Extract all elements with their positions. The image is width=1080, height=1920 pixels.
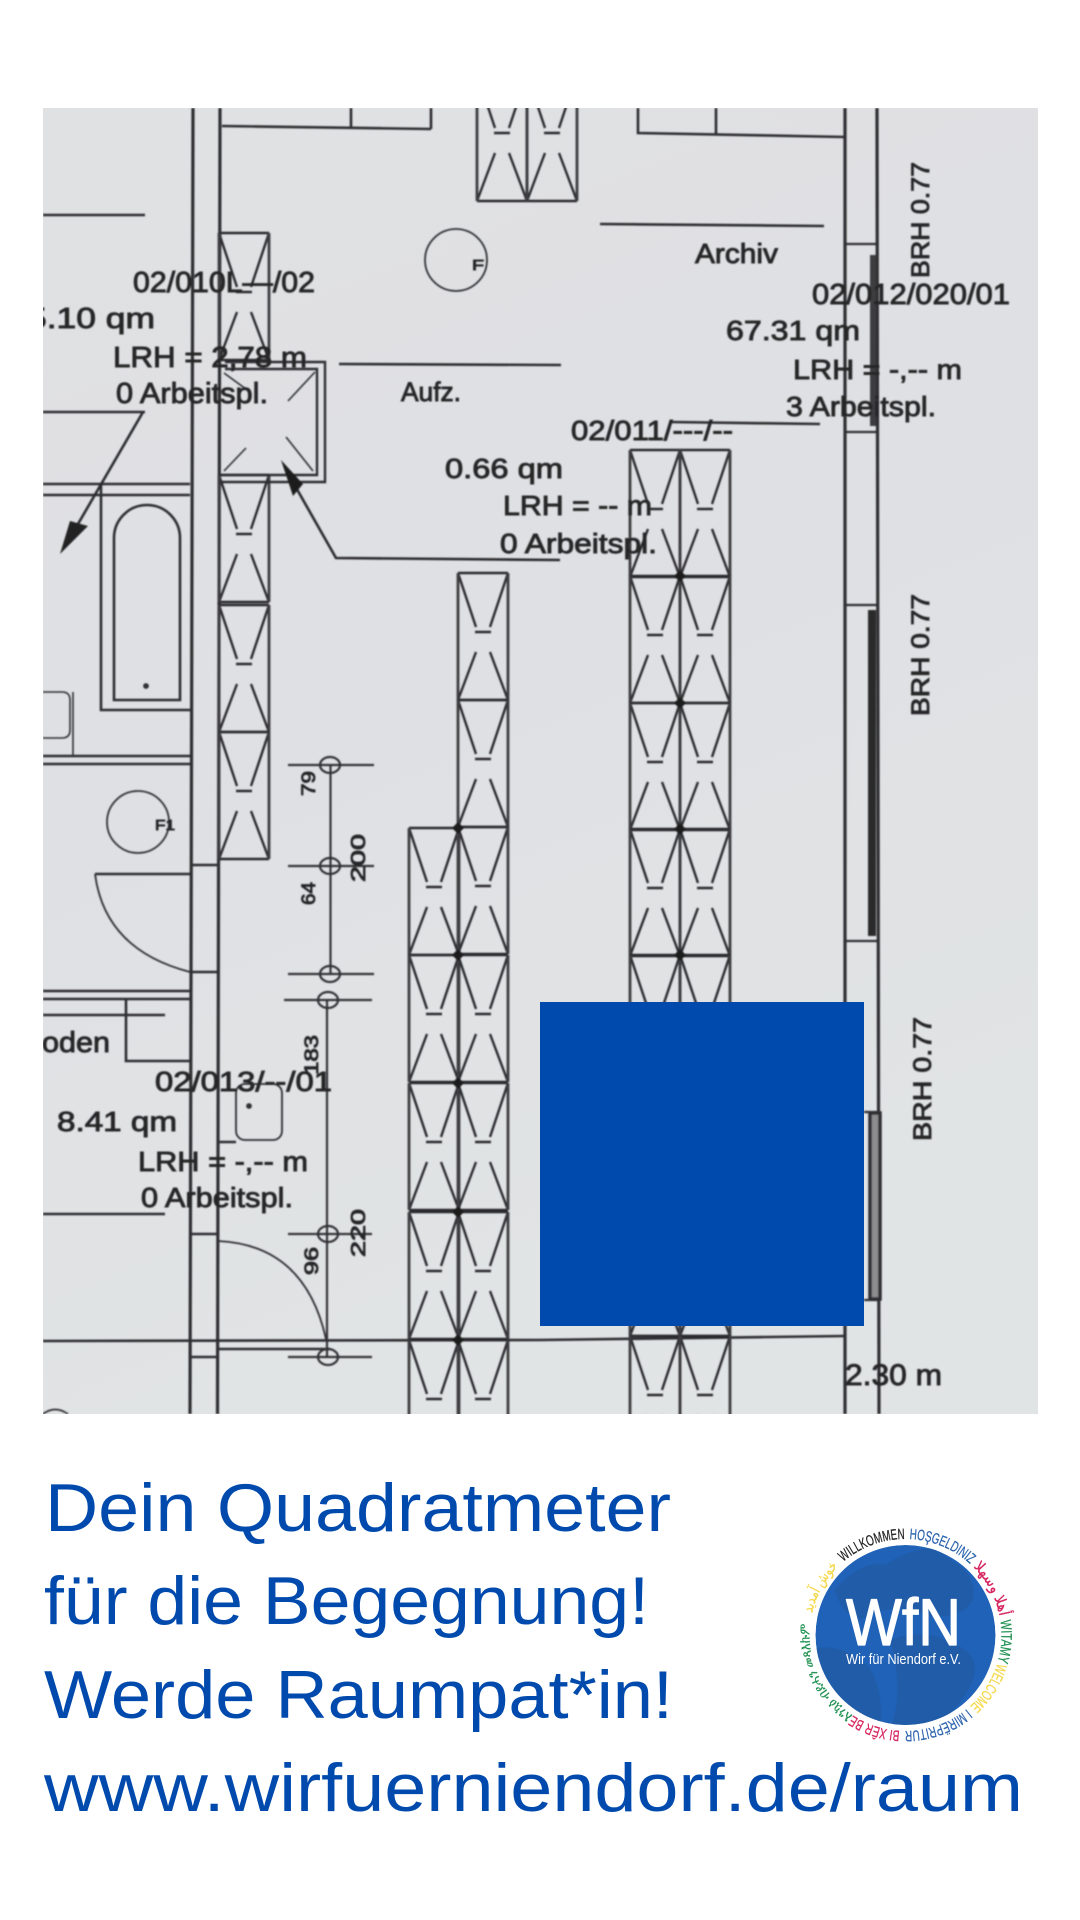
- plan labels: 5.10 qm: [27, 303, 155, 335]
- plan labels: 79: [299, 771, 320, 796]
- walls and room lines: [43, 108, 879, 1414]
- plan labels: 8.41 qm: [57, 1106, 177, 1137]
- plan labels: 0.66 qm: [445, 453, 563, 484]
- panel: floor plan photo: [25, 74, 1038, 1467]
- plan labels: LRH = -- m: [503, 490, 652, 521]
- blue square: [540, 1002, 864, 1326]
- logo ring of welcome words: HOŞGELDINIZ: [910, 1528, 977, 1564]
- plan labels: 200: [348, 834, 370, 882]
- arrow: elevator pointer: [281, 460, 560, 560]
- logo ring of welcome words: WELCOME: [970, 1664, 1008, 1714]
- plan labels: Archiv: [695, 238, 778, 269]
- plan labels: LRH = -,-- m: [793, 354, 962, 385]
- dimension chain: [284, 757, 374, 1365]
- plan labels: 64: [299, 882, 320, 905]
- heading: call to action: Werde Raumpat*in!: [44, 1657, 673, 1733]
- plan labels: 67.31 qm: [726, 315, 860, 346]
- plan labels: [25, 162, 1010, 1392]
- plan labels: 0 Arbeitspl.: [500, 528, 657, 559]
- plan labels: BRH 0.77: [907, 594, 935, 716]
- plan labels: 3 Arbeitspl.: [786, 391, 936, 422]
- logo ring of welcome words: I MIRËPRITUR: [905, 1709, 973, 1742]
- logo ring of welcome words: WITAMY: [998, 1619, 1012, 1664]
- plan labels: 2.30 m: [845, 1359, 942, 1392]
- plan labels: 183: [302, 1035, 323, 1075]
- logo: Wir für Niendorf e.V.: [800, 1528, 1014, 1742]
- logo ring of welcome words: [800, 1528, 1014, 1742]
- plan labels: 0 Arbeitspl.: [116, 378, 268, 410]
- logo ring of welcome words: خوش آمدید: [806, 1563, 835, 1613]
- plan labels: BRH 0.77: [909, 1017, 937, 1141]
- plan labels: LRH = -,-- m: [138, 1146, 308, 1177]
- heading: call to action: www.wirfuerniendorf.de/raum: [43, 1750, 1023, 1826]
- window bays: [219, 74, 730, 1467]
- plan labels: F1: [155, 817, 175, 834]
- logo ring of welcome words: WILLKOMMEN: [836, 1528, 904, 1561]
- plan labels: 96: [302, 1247, 323, 1275]
- plan labels: 02/010L—/02: [133, 267, 315, 299]
- right wall windows: [845, 244, 880, 1300]
- logo monogram: WfN: [846, 1585, 961, 1659]
- plan labels: 220: [348, 1209, 370, 1257]
- plan labels: 02/011/---/--: [571, 415, 733, 446]
- logo ring of welcome words: BI XÊR BE: [848, 1715, 900, 1742]
- logo ring of welcome words: أهلا وسهلا: [974, 1560, 1014, 1616]
- plan labels: Aufz.: [401, 377, 461, 407]
- logo ring of welcome words: እንኳዕ ብደሓን መጻእኩም: [800, 1624, 852, 1722]
- arrow: left room pointer: [60, 412, 143, 554]
- heading: call to action: für die Begegnung!: [44, 1563, 649, 1639]
- plan labels: boden: [25, 1027, 110, 1059]
- heading: call to action: Dein Quadratmeter: [45, 1470, 671, 1546]
- heading: call to action: [43, 1470, 1023, 1826]
- plan labels: 02/012/020/01: [812, 279, 1010, 311]
- fixtures: shafts: [107, 229, 487, 1108]
- plan labels: F: [472, 257, 484, 274]
- plan labels: BRH 0.77: [907, 162, 935, 278]
- plan labels: LRH = 2,78 m: [113, 342, 307, 374]
- logo globe: [810, 1545, 996, 1730]
- plan labels: 02/013/--/01: [155, 1066, 332, 1097]
- logo name: Wir für Niendorf e.V.: [846, 1651, 961, 1668]
- elevator shaft: [220, 362, 325, 482]
- plan labels: 0 Arbeitspl.: [141, 1182, 293, 1213]
